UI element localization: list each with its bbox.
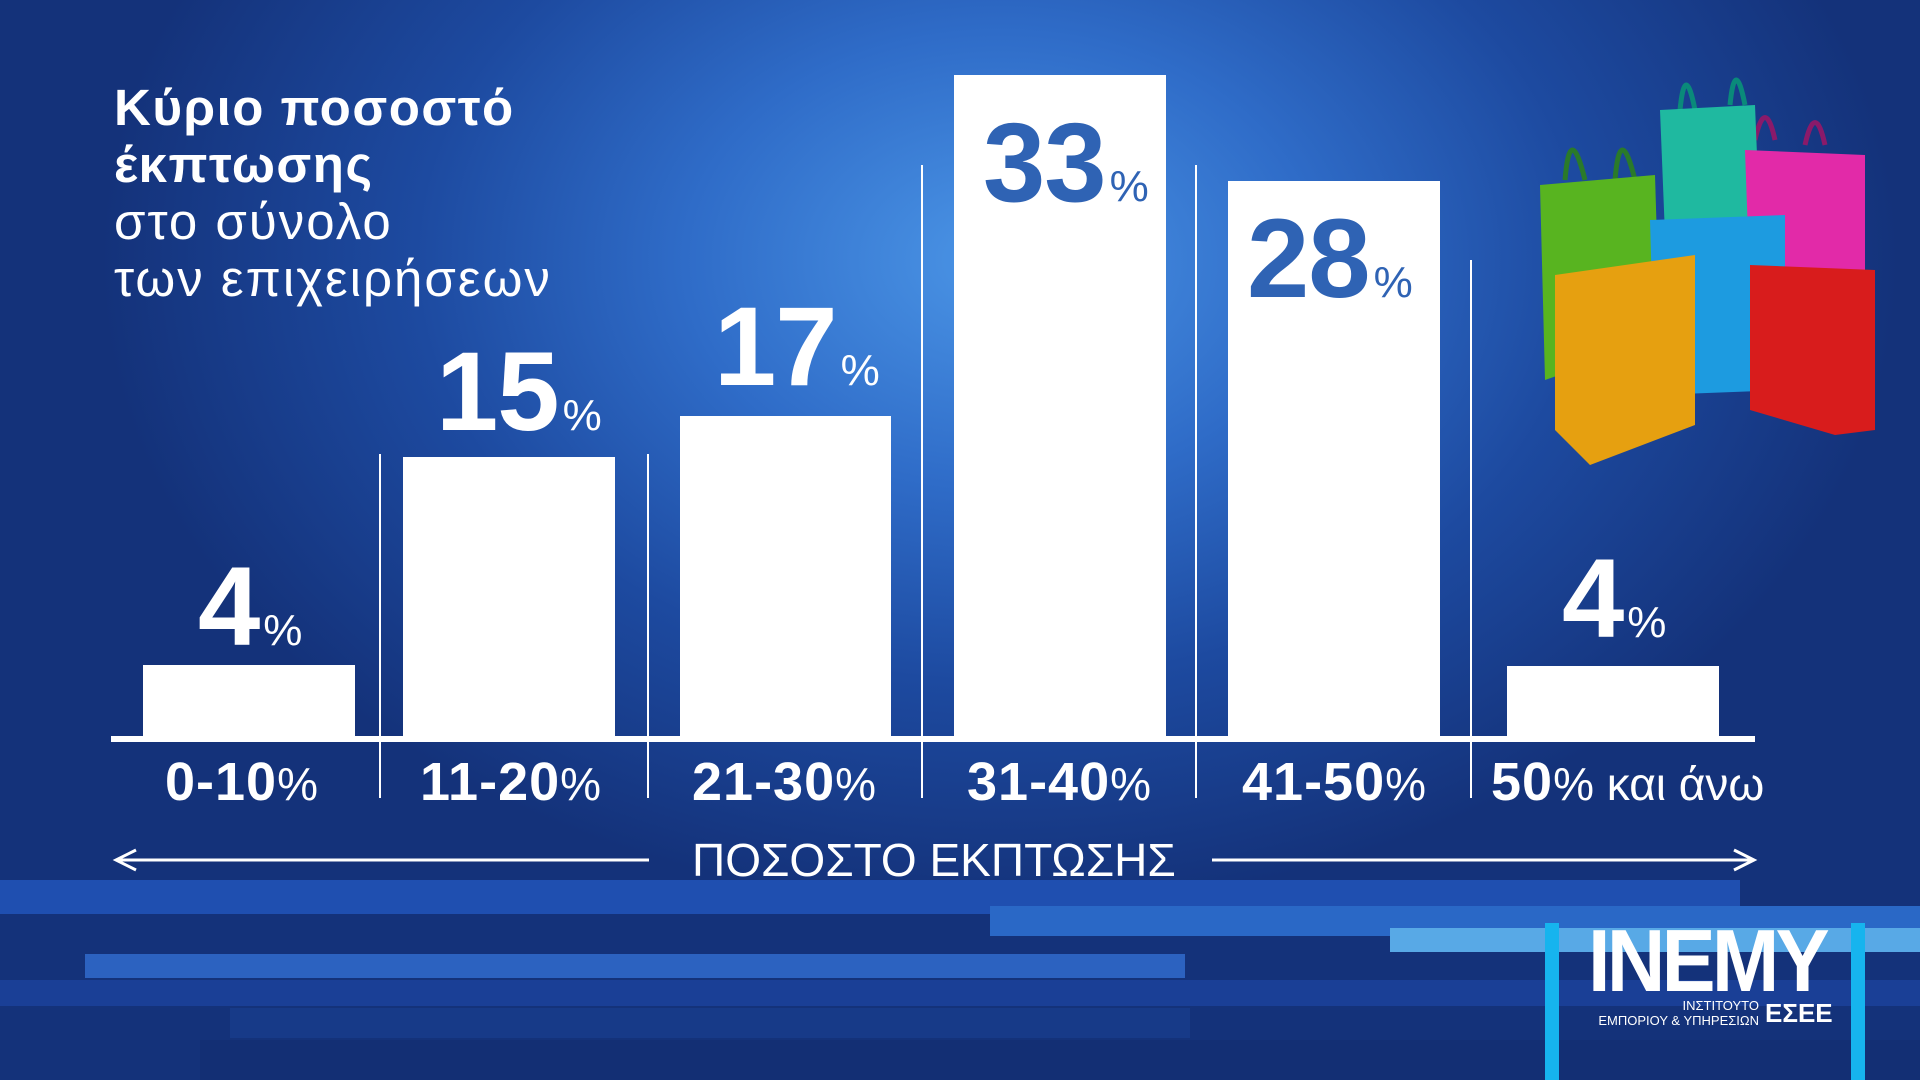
value 4 last: 4% [1562,536,1666,661]
axis title with arrows: ΠΟΣΟΣΤΟ ΕΚΠΤΩΣΗΣ [692,834,1176,886]
icon: shopping bags [1540,78,1875,465]
title: των επιχειρήσεων [114,250,552,307]
bar 50+ [1507,666,1719,741]
title [114,79,552,307]
bar chart [111,75,1755,742]
category labels: 11-20% [420,752,601,812]
bar 11-20 [403,457,615,741]
logo: INEMY [1545,911,1865,1080]
bar 41-50 [1228,181,1440,741]
background stripes [0,880,1920,1038]
logo: INEMY: ΕΜΠΟΡΙΟΥ & ΥΠΗΡΕΣΙΩΝ [1598,1013,1759,1028]
bar 21-30 [680,416,891,741]
value 28: 28% [1247,196,1413,321]
category labels [165,752,1764,812]
axis title with arrows [112,834,1758,886]
category labels: 21-30% [692,752,876,812]
logo: INEMY: ΕΣΕΕ [1765,998,1833,1028]
value 17: 17% [714,284,880,409]
baseline [111,736,1755,742]
divider lines [117,107,1859,870]
category labels: 0-10% [165,752,318,812]
title: στο σύνολο [114,193,393,250]
bar 0-10 [143,665,355,741]
title: Κύριο ποσοστό [114,79,515,136]
title: έκπτωσης [114,136,373,193]
category labels: 31-40% [967,752,1151,812]
logo: INEMY: ΙΝΣΤΙΤΟΥΤΟ [1683,998,1759,1013]
category labels: 41-50% [1242,752,1426,812]
value 4: 4% [198,544,302,669]
category labels: 50% και άνω [1491,752,1764,812]
value 33: 33% [983,100,1149,225]
bar 31-40 [954,75,1166,741]
value 15: 15% [436,329,602,454]
logo: INEMY: INEMY [1588,911,1826,1010]
